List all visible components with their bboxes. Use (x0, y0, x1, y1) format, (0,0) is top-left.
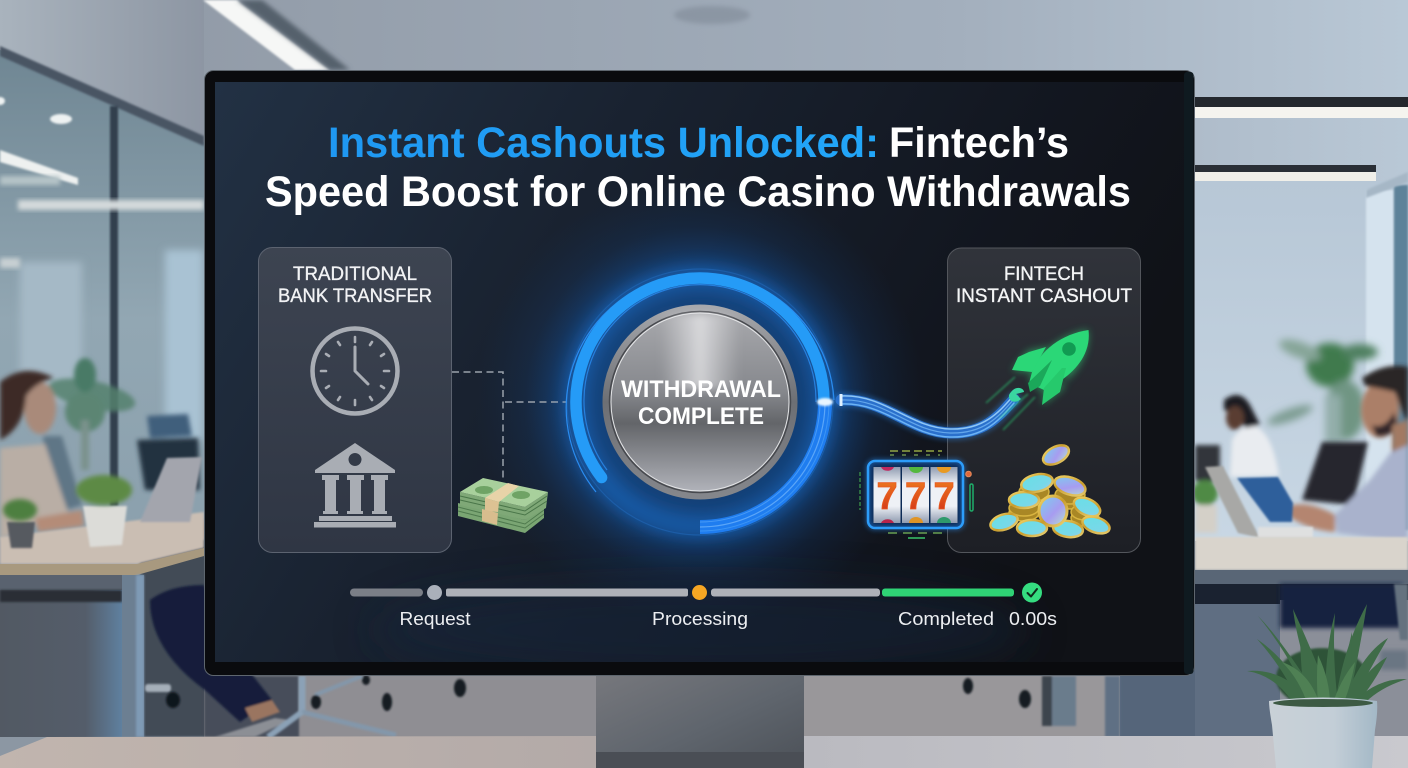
title (265, 119, 1131, 216)
label: withdrawal complete: WITHDRAWAL (621, 376, 781, 403)
plant pot (1269, 698, 1377, 768)
fibre trail to rocket (841, 394, 1014, 437)
progress timeline (350, 582, 1057, 629)
plant leaves (1247, 604, 1407, 708)
coworker, left (0, 358, 205, 540)
title: Instant Cashouts Unlocked: (328, 119, 879, 167)
laptop, left (140, 457, 202, 522)
central progress ring (566, 269, 834, 535)
under-desk shadow, left (140, 540, 206, 737)
floor and chairs (150, 585, 1210, 737)
reels: 7 (905, 476, 926, 518)
panel: fintech instant cashout (948, 248, 1140, 552)
heading: traditional bank transfer (278, 263, 432, 307)
thick progress arc (576, 278, 824, 478)
reels: 7 (934, 476, 955, 518)
step: request (400, 585, 470, 629)
step: request: Request (400, 608, 470, 629)
step: processing: Processing (652, 608, 748, 629)
icon: slot machine (860, 451, 973, 538)
glass wall, left (0, 46, 204, 540)
step: elapsed time with check (1009, 582, 1057, 629)
heading: traditional bank transfer: BANK TRANSFER (278, 285, 432, 307)
metal disc (602, 304, 798, 500)
icon: rocket (986, 330, 1089, 430)
desk plants, left (3, 475, 132, 548)
icon: pile of coins (988, 441, 1112, 539)
desk, left (0, 512, 204, 737)
foreground desk (0, 736, 596, 768)
reels: 7 (876, 476, 898, 518)
foreground desk, right side (804, 736, 1408, 768)
monitor (204, 70, 1194, 680)
screen (215, 82, 1184, 662)
desk, right (1195, 537, 1408, 737)
monitor bezel (204, 70, 1194, 676)
title: Fintech’s (889, 119, 1069, 167)
heading: fintech instant cashout: FINTECH (1004, 263, 1084, 285)
screen glow (370, 177, 1030, 680)
ceiling (0, 0, 1408, 200)
tossed coin (1040, 441, 1072, 469)
ring glow (576, 278, 824, 526)
coworkers, right (1192, 335, 1408, 543)
title: Speed Boost for Online Casino Withdrawals (265, 168, 1131, 216)
icon: clock (312, 328, 398, 414)
label: withdrawal complete: COMPLETE (638, 403, 764, 430)
heading: fintech instant cashout: INSTANT CASHOUT (956, 285, 1132, 307)
heading: fintech instant cashout (956, 263, 1132, 307)
slot light accents (860, 451, 973, 538)
track segments (350, 588, 1014, 596)
heading: traditional bank transfer: TRADITIONAL (293, 263, 417, 285)
step: completed: Completed (898, 608, 994, 629)
fibre arc (700, 398, 833, 534)
panel: traditional bank transfer (258, 248, 452, 552)
monitor stand (596, 672, 804, 768)
step: elapsed time with check: 0.00s (1009, 608, 1057, 629)
thin orbit lines (566, 269, 834, 535)
laptop and tablet, right (1205, 466, 1313, 538)
dashed connector (452, 372, 567, 478)
reels (874, 467, 958, 523)
icon: stack of cash (458, 478, 548, 533)
label: withdrawal complete (621, 376, 781, 430)
back wall, right (1190, 97, 1408, 541)
step: processing (652, 585, 748, 629)
icon: bank (314, 443, 396, 528)
foreground potted plant (1247, 604, 1407, 768)
